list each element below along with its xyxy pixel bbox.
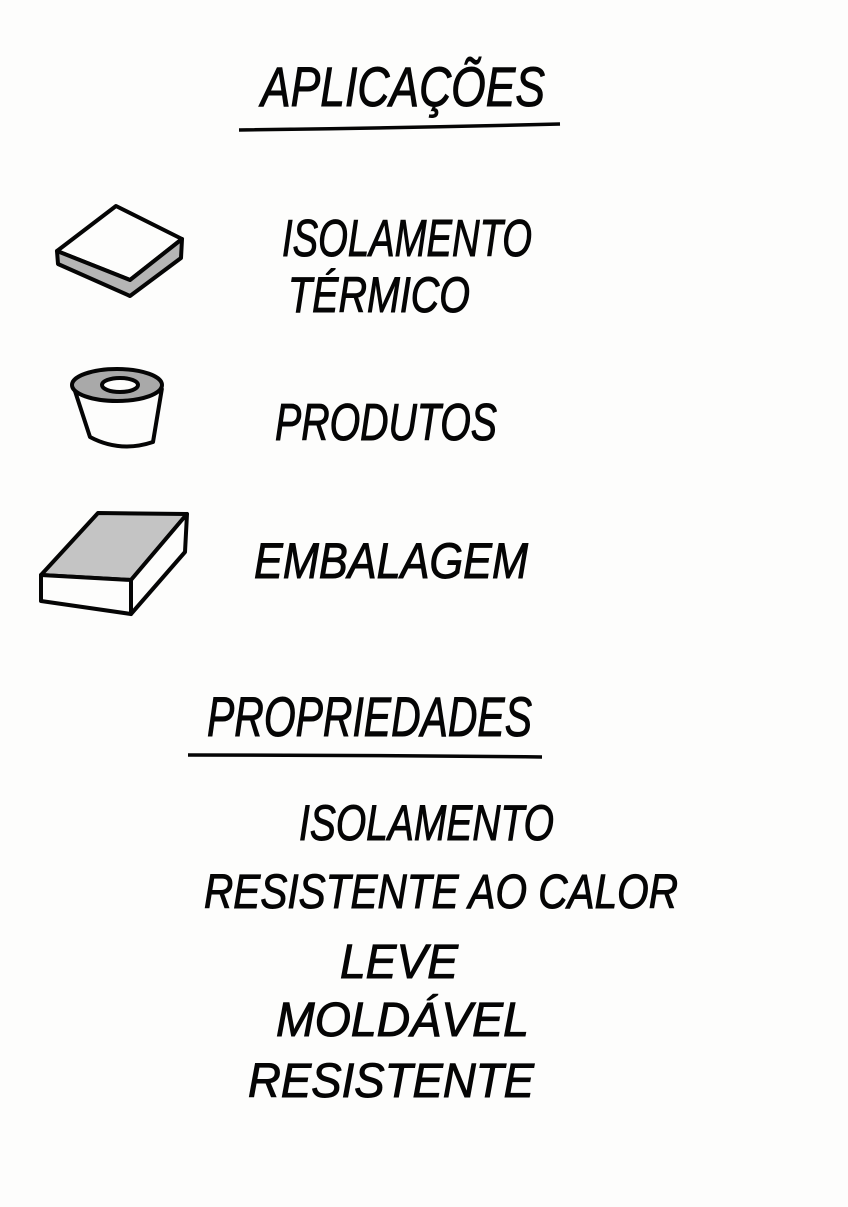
icon: moulded cup xyxy=(72,369,162,446)
label: produtos: PRODUTOS xyxy=(275,394,497,452)
list: properties: LEVE xyxy=(340,936,459,989)
list: properties: RESISTENTE xyxy=(248,1055,535,1108)
heading: aplicações xyxy=(239,55,560,130)
heading: aplicações: APLICAÇÕES xyxy=(259,55,545,118)
label: isolamento térmico: TÉRMICO xyxy=(288,267,470,323)
list: properties xyxy=(204,795,678,1108)
label: isolamento térmico: ISOLAMENTO xyxy=(282,210,532,268)
list: properties: ISOLAMENTO xyxy=(299,795,554,851)
icon: packaging box xyxy=(41,513,187,614)
list: properties: MOLDÁVEL xyxy=(276,994,529,1047)
label: isolamento térmico xyxy=(282,210,532,323)
list: properties: RESISTENTE AO CALOR xyxy=(204,866,678,919)
label: embalagem: EMBALAGEM xyxy=(254,533,528,589)
icon: insulation board xyxy=(57,206,182,296)
heading: propriedades: PROPRIEDADES xyxy=(207,685,532,748)
